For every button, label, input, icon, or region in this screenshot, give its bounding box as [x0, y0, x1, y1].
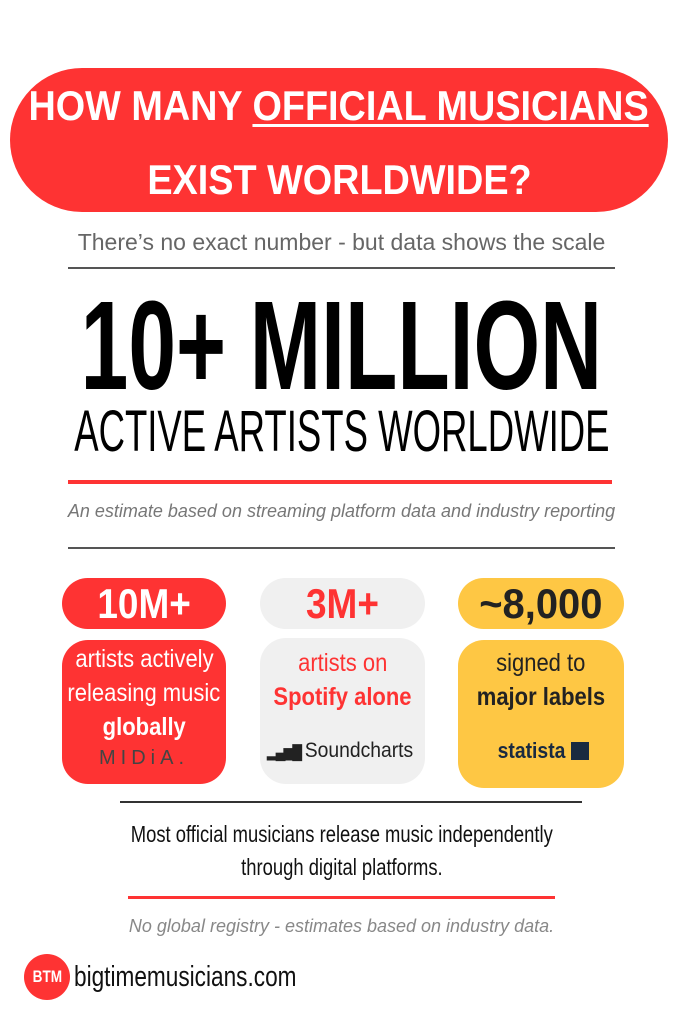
- headline subtext: ACTIVE ARTISTS WORLDWIDE: [74, 399, 609, 464]
- headline number: 10+ MILLION: [81, 275, 602, 416]
- footnote: No global registry - estimates based on industry data.: [129, 916, 554, 936]
- body card 3: [458, 640, 624, 788]
- estimate note: An estimate based on streaming platform data and industry reporting: [68, 501, 615, 521]
- summary text: Most official musicians release music independently: [130, 821, 553, 847]
- summary text: [130, 821, 553, 880]
- title banner: [10, 68, 668, 212]
- pill ~8,000: ~8,000: [479, 580, 603, 627]
- footer brand: [24, 954, 297, 1000]
- pill 3M+: [260, 578, 425, 629]
- subtitle: There’s no exact number - but data shows the scale: [78, 229, 605, 255]
- pill 3M+: 3M+: [306, 580, 379, 627]
- body card 1: [62, 640, 226, 784]
- title line 1: HOW MANY OFFICIAL MUSICIANS: [29, 82, 649, 129]
- logo statista: statista: [498, 738, 566, 763]
- pill 10M+: 10M+: [97, 580, 191, 627]
- body card 1: artists actively: [75, 645, 213, 673]
- body card 2: [260, 638, 425, 784]
- icon: BTM logo: BTM: [32, 967, 62, 986]
- body card 3: major labels: [477, 683, 605, 711]
- body card 3: signed to: [496, 649, 586, 677]
- stat card 3: [458, 578, 624, 788]
- stat card 1: [62, 578, 226, 784]
- title line 2: EXIST WORLDWIDE?: [147, 156, 531, 203]
- body card 1: globally: [102, 713, 186, 741]
- logo Soundcharts: Soundcharts: [305, 739, 413, 762]
- pill ~8,000: [458, 578, 624, 629]
- icon: BTM logo: [24, 954, 70, 1000]
- pill 10M+: [62, 578, 226, 629]
- body card 1: releasing music: [68, 679, 220, 707]
- stat card 2: [260, 578, 425, 784]
- summary text: through digital platforms.: [241, 854, 442, 880]
- site url: bigtimemusicians.com: [74, 961, 297, 993]
- body card 2: artists on: [298, 649, 387, 677]
- body card 2: Spotify alone: [273, 683, 412, 711]
- logo MIDiA: MIDiA.: [99, 747, 189, 769]
- logo Soundcharts: ▂▄▆█: [267, 744, 300, 760]
